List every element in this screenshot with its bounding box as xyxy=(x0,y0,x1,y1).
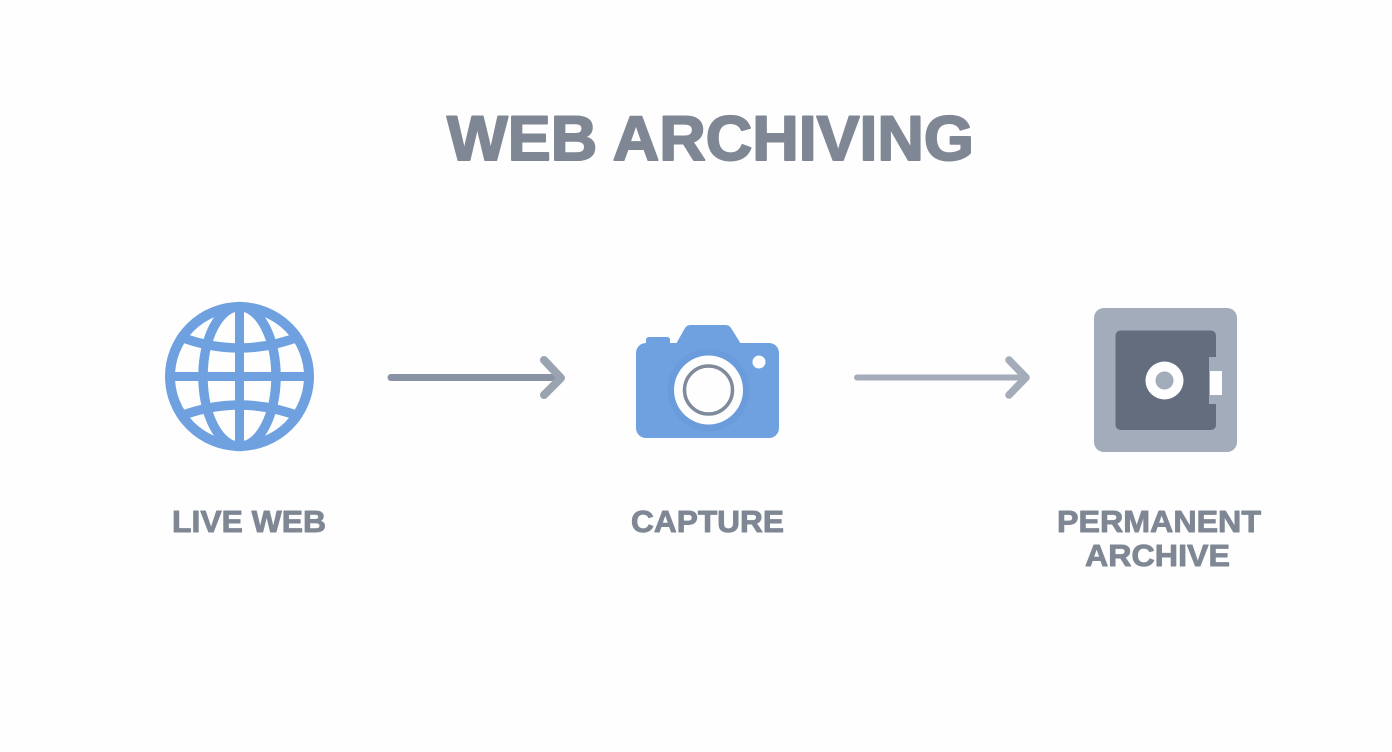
arrow: live web to capture xyxy=(391,360,561,395)
label: permanent archive: ARCHIVE xyxy=(1085,538,1230,573)
label: permanent archive xyxy=(1057,504,1261,573)
icon: globe xyxy=(170,306,309,447)
label: capture: CAPTURE xyxy=(631,504,784,539)
icon: safe xyxy=(1094,308,1237,452)
label: live web: LIVE WEB xyxy=(172,504,326,539)
icon: camera xyxy=(636,325,779,438)
title: WEB ARCHIVING xyxy=(447,104,974,174)
arrow: capture to archive xyxy=(857,360,1026,395)
label: permanent archive: PERMANENT xyxy=(1057,504,1261,539)
